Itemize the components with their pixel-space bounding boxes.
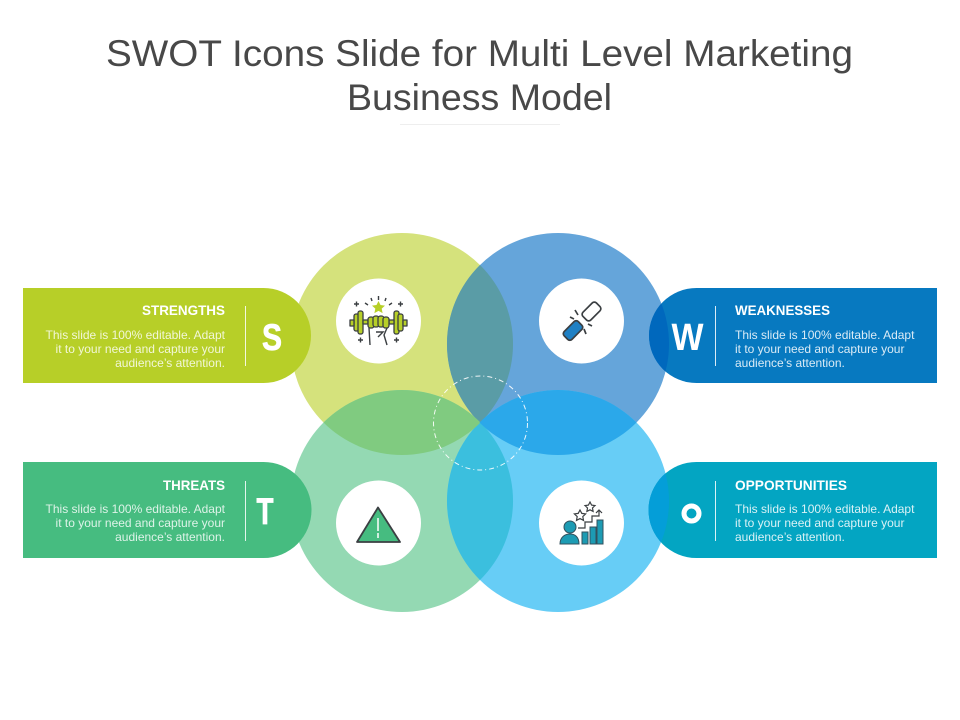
panel: opportunities label	[648, 462, 937, 558]
title	[106, 33, 853, 118]
panel: strengths label: S	[262, 317, 282, 358]
panel: strengths label: audience’s attention.	[115, 356, 225, 370]
icon: person with growth chart	[539, 480, 624, 566]
panel: threats label: audience’s attention.	[115, 530, 225, 544]
panel: threats label: T	[256, 491, 274, 532]
panel: threats label	[23, 462, 312, 558]
title: SWOT Icons Slide for Multi Level Marketing	[106, 33, 853, 74]
panel: weaknesses label: it to your need and capture your	[735, 342, 904, 356]
icon: warning triangle	[336, 480, 421, 566]
panel: opportunities label: audience’s attention.	[735, 530, 845, 544]
panel: threats label: it to your need and capture your	[56, 516, 225, 530]
panel: weaknesses label	[649, 288, 937, 383]
panel: weaknesses label: audience’s attention.	[735, 356, 845, 370]
panel: threats label: THREATS	[163, 477, 225, 493]
icon: flexed fist with dumbbell	[336, 278, 421, 364]
panel: strengths label: it to your need and capture your	[56, 342, 225, 356]
title: Business Model	[347, 77, 612, 118]
panel: opportunities label: OPPORTUNITIES	[735, 477, 847, 493]
panel: threats label: This slide is 100% editable. Adapt	[46, 502, 226, 516]
panel: opportunities label: This slide is 100% editable. Adapt	[735, 502, 915, 516]
venn diagram	[291, 233, 669, 612]
panel: strengths label	[23, 288, 311, 383]
panel: strengths label: This slide is 100% editable. Adapt	[46, 328, 226, 342]
panel: strengths label: STRENGTHS	[142, 302, 225, 318]
panel: opportunities label: it to your need and capture your	[735, 516, 904, 530]
panel: weaknesses label: This slide is 100% editable. Adapt	[735, 328, 915, 342]
panel: weaknesses label: WEAKNESSES	[735, 302, 830, 318]
dashed centre circle	[434, 376, 528, 470]
icon: broken chain link	[539, 278, 624, 364]
panel: weaknesses label: W	[672, 317, 704, 359]
